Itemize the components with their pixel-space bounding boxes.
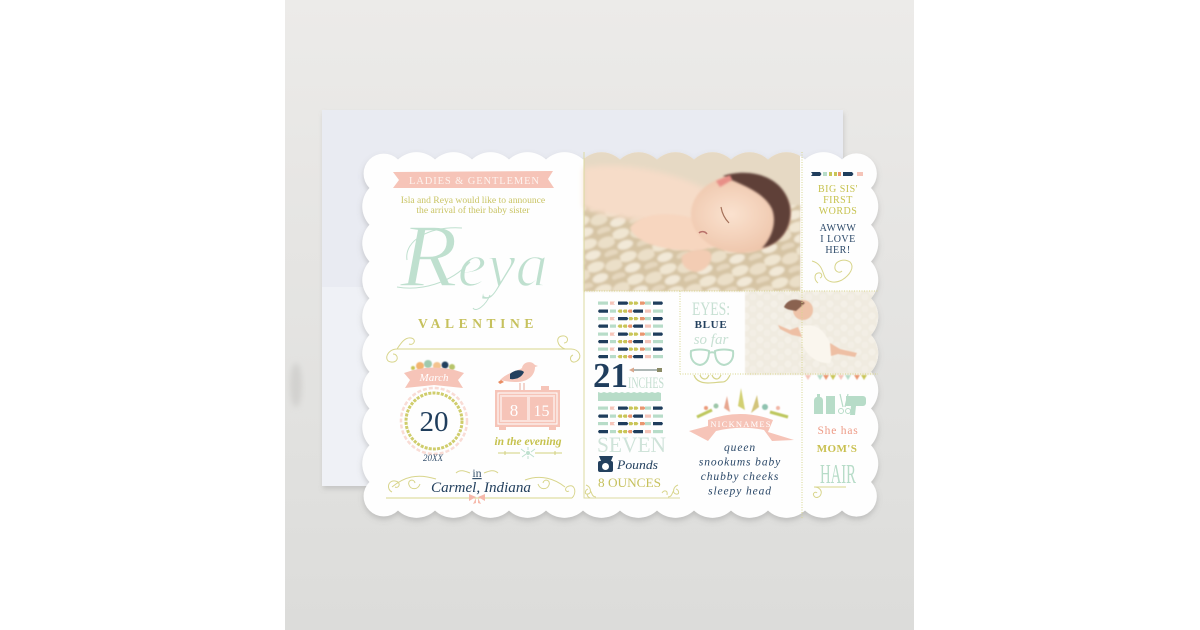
first words heading: WORDS	[819, 206, 857, 217]
first words heading: FIRST	[823, 195, 853, 206]
ornament: gold lace	[694, 375, 730, 383]
ornament: upper gold frame	[387, 336, 580, 362]
floral garland	[411, 360, 455, 370]
panel: announcement header	[393, 171, 554, 331]
ruler	[598, 392, 661, 401]
ornament: swirl	[813, 487, 846, 497]
eyes label: EYES:	[692, 299, 730, 320]
length number: 21	[593, 356, 628, 395]
ornament: sunburst divider	[498, 447, 562, 459]
announcement text: Isla and Reya would like to announce	[401, 195, 545, 206]
word: in: in	[472, 466, 482, 480]
so far label: so far	[694, 332, 728, 348]
icon: arrow	[629, 368, 662, 372]
ornament: script flourish	[397, 228, 490, 310]
icon: glasses	[691, 350, 733, 365]
year: 20XX	[423, 453, 443, 463]
weight: seven: SEVEN	[597, 432, 666, 457]
arrow rows: lower block	[598, 406, 663, 433]
name: Reya: Reya	[399, 207, 548, 306]
panel: location	[386, 466, 575, 504]
first words heading: BIG SIS'	[818, 184, 858, 195]
time of day label: in the evening	[494, 436, 562, 448]
icon: flip clock: 8	[510, 401, 518, 420]
she has label: She has	[817, 425, 859, 437]
quote: AWWW	[820, 223, 856, 234]
banner: March: March	[419, 372, 449, 384]
inches label: INCHES	[628, 375, 664, 392]
blue label: BLUE	[695, 319, 727, 331]
ornament: lower gold frame	[386, 476, 575, 498]
photo: sleeping newborn	[584, 148, 800, 291]
panel: nicknames	[689, 388, 794, 498]
date wreath	[401, 388, 467, 454]
photo: baby on white blanket	[745, 291, 880, 375]
icon: flip clock: 15	[534, 403, 550, 420]
ornament: swirl	[812, 260, 852, 283]
ornament: corner swirls	[585, 485, 679, 498]
marble background	[285, 0, 914, 630]
floral feather crown	[697, 388, 788, 417]
nickname list: sleepy head	[708, 486, 772, 498]
date number: 20	[420, 406, 448, 438]
icon: scale	[598, 456, 613, 472]
icon: bird	[498, 362, 538, 390]
banner: nicknames: NICKNAMES	[710, 419, 772, 429]
banner: ladies and gentlemen: LADIES & GENTLEMEN	[409, 176, 539, 187]
panel dividers	[584, 152, 878, 518]
panel: big sister's first words	[811, 172, 863, 283]
infographic canvas	[285, 0, 914, 630]
ounces label: 8 OUNCES	[598, 476, 661, 490]
icon: bow	[469, 494, 485, 504]
quote: I LOVE	[820, 234, 856, 245]
scalloped card	[362, 152, 878, 518]
surname: Valentine: VALENTINE	[418, 316, 538, 331]
nickname list: queen	[724, 442, 756, 454]
announcement text: the arrival of their baby sister	[416, 205, 530, 216]
ornament: swirl behind in	[456, 471, 498, 473]
panel: birth time	[494, 362, 562, 459]
group: photos clipped to card	[584, 148, 880, 375]
icon: flip clock	[495, 386, 560, 430]
hair label: HAIR	[820, 459, 856, 489]
panel: baby measurements	[585, 302, 679, 498]
arrow row	[811, 172, 863, 176]
icons: beauty tools	[814, 394, 866, 415]
nickname list: chubby cheeks	[701, 471, 779, 483]
quote: HER!	[825, 245, 851, 256]
pounds label: Pounds	[616, 457, 658, 472]
location text: Carmel, Indiana	[431, 480, 531, 496]
panel: date	[401, 360, 467, 463]
nickname list: snookums baby	[699, 456, 781, 468]
panel: hair	[805, 375, 867, 497]
bunting	[805, 375, 867, 380]
banner: ladies and gentlemen	[393, 171, 554, 188]
mom's label: MOM'S	[817, 443, 857, 455]
envelope	[322, 110, 843, 486]
panel: eyes	[691, 299, 733, 365]
arrow rows: top block	[598, 302, 663, 358]
